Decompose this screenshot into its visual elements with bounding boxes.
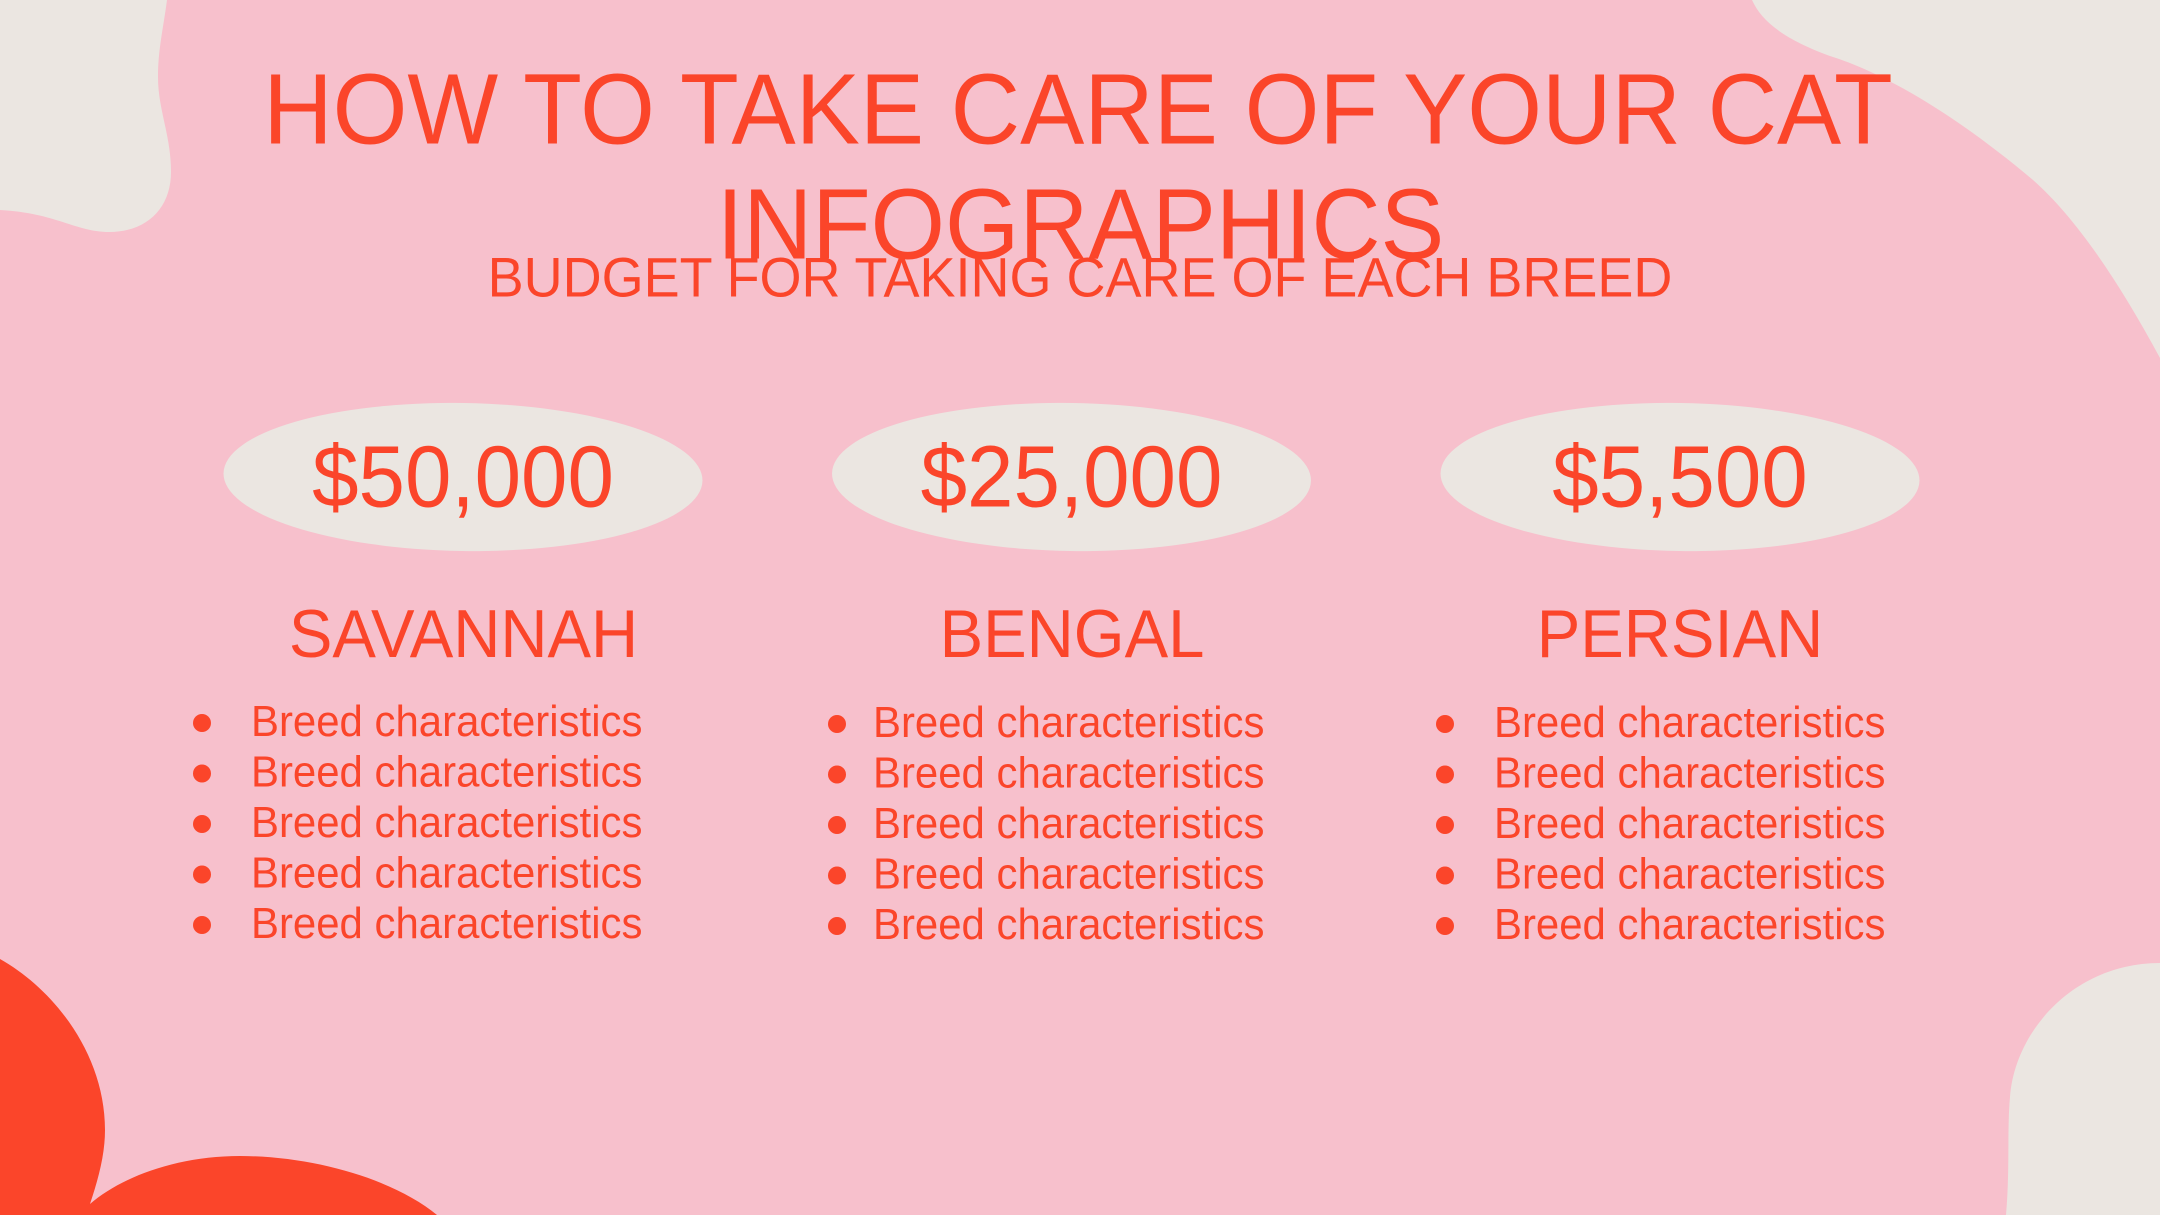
panel: Savannah budget	[193, 399, 704, 948]
characteristics list: Savannah: Breed characteristics	[251, 748, 642, 797]
price oval: $50,000: $50,000	[312, 429, 614, 526]
characteristics list: Persian: Breed characteristics	[1494, 698, 1885, 747]
characteristics list: Persian: Breed characteristics	[1494, 900, 1885, 949]
characteristics list: Savannah: Breed characteristics	[251, 798, 642, 847]
price oval: $50,000	[222, 399, 704, 555]
characteristics list: Savannah	[193, 697, 642, 948]
characteristics list: Persian	[1436, 698, 1885, 949]
characteristics list: Savannah: Breed characteristics	[251, 849, 642, 898]
breed name: Savannah: SAVANNAH	[289, 597, 638, 672]
characteristics list: Bengal: Breed characteristics	[873, 850, 1264, 899]
blob: top right	[1752, 0, 2160, 358]
characteristics list: Persian: Breed characteristics	[1494, 749, 1885, 798]
characteristics list: Bengal: Breed characteristics	[873, 698, 1264, 747]
characteristics list: Bengal: Breed characteristics	[873, 900, 1264, 949]
characteristics list: Savannah: Breed characteristics	[251, 899, 642, 948]
breed name: Bengal: BENGAL	[940, 597, 1204, 672]
characteristics list: Persian: Breed characteristics	[1494, 799, 1885, 848]
price oval: $5,500: $5,500	[1552, 429, 1808, 526]
characteristics list: Savannah: Breed characteristics	[251, 697, 642, 746]
price oval: $25,000: $25,000	[921, 429, 1222, 526]
panel: Bengal budget	[828, 399, 1312, 949]
blob: bottom right	[2006, 963, 2160, 1215]
panel: Persian budget	[1436, 399, 1921, 949]
breed name: Persian: PERSIAN	[1537, 597, 1823, 672]
title: HOW TO TAKE CARE OF YOUR CAT	[263, 53, 1893, 165]
title	[263, 53, 1893, 280]
blob: top left	[0, 0, 171, 232]
price oval: $5,500	[1439, 399, 1921, 555]
price oval: $25,000	[831, 399, 1312, 555]
subtitle: BUDGET FOR TAKING CARE OF EACH BREED	[488, 246, 1672, 309]
blob: bottom left red petals	[0, 959, 437, 1215]
characteristics list: Bengal: Breed characteristics	[873, 749, 1264, 798]
title: INFOGRAPHICS	[717, 168, 1444, 280]
characteristics list: Bengal: Breed characteristics	[873, 799, 1264, 848]
characteristics list: Persian: Breed characteristics	[1494, 850, 1885, 899]
characteristics list: Bengal	[828, 698, 1264, 949]
